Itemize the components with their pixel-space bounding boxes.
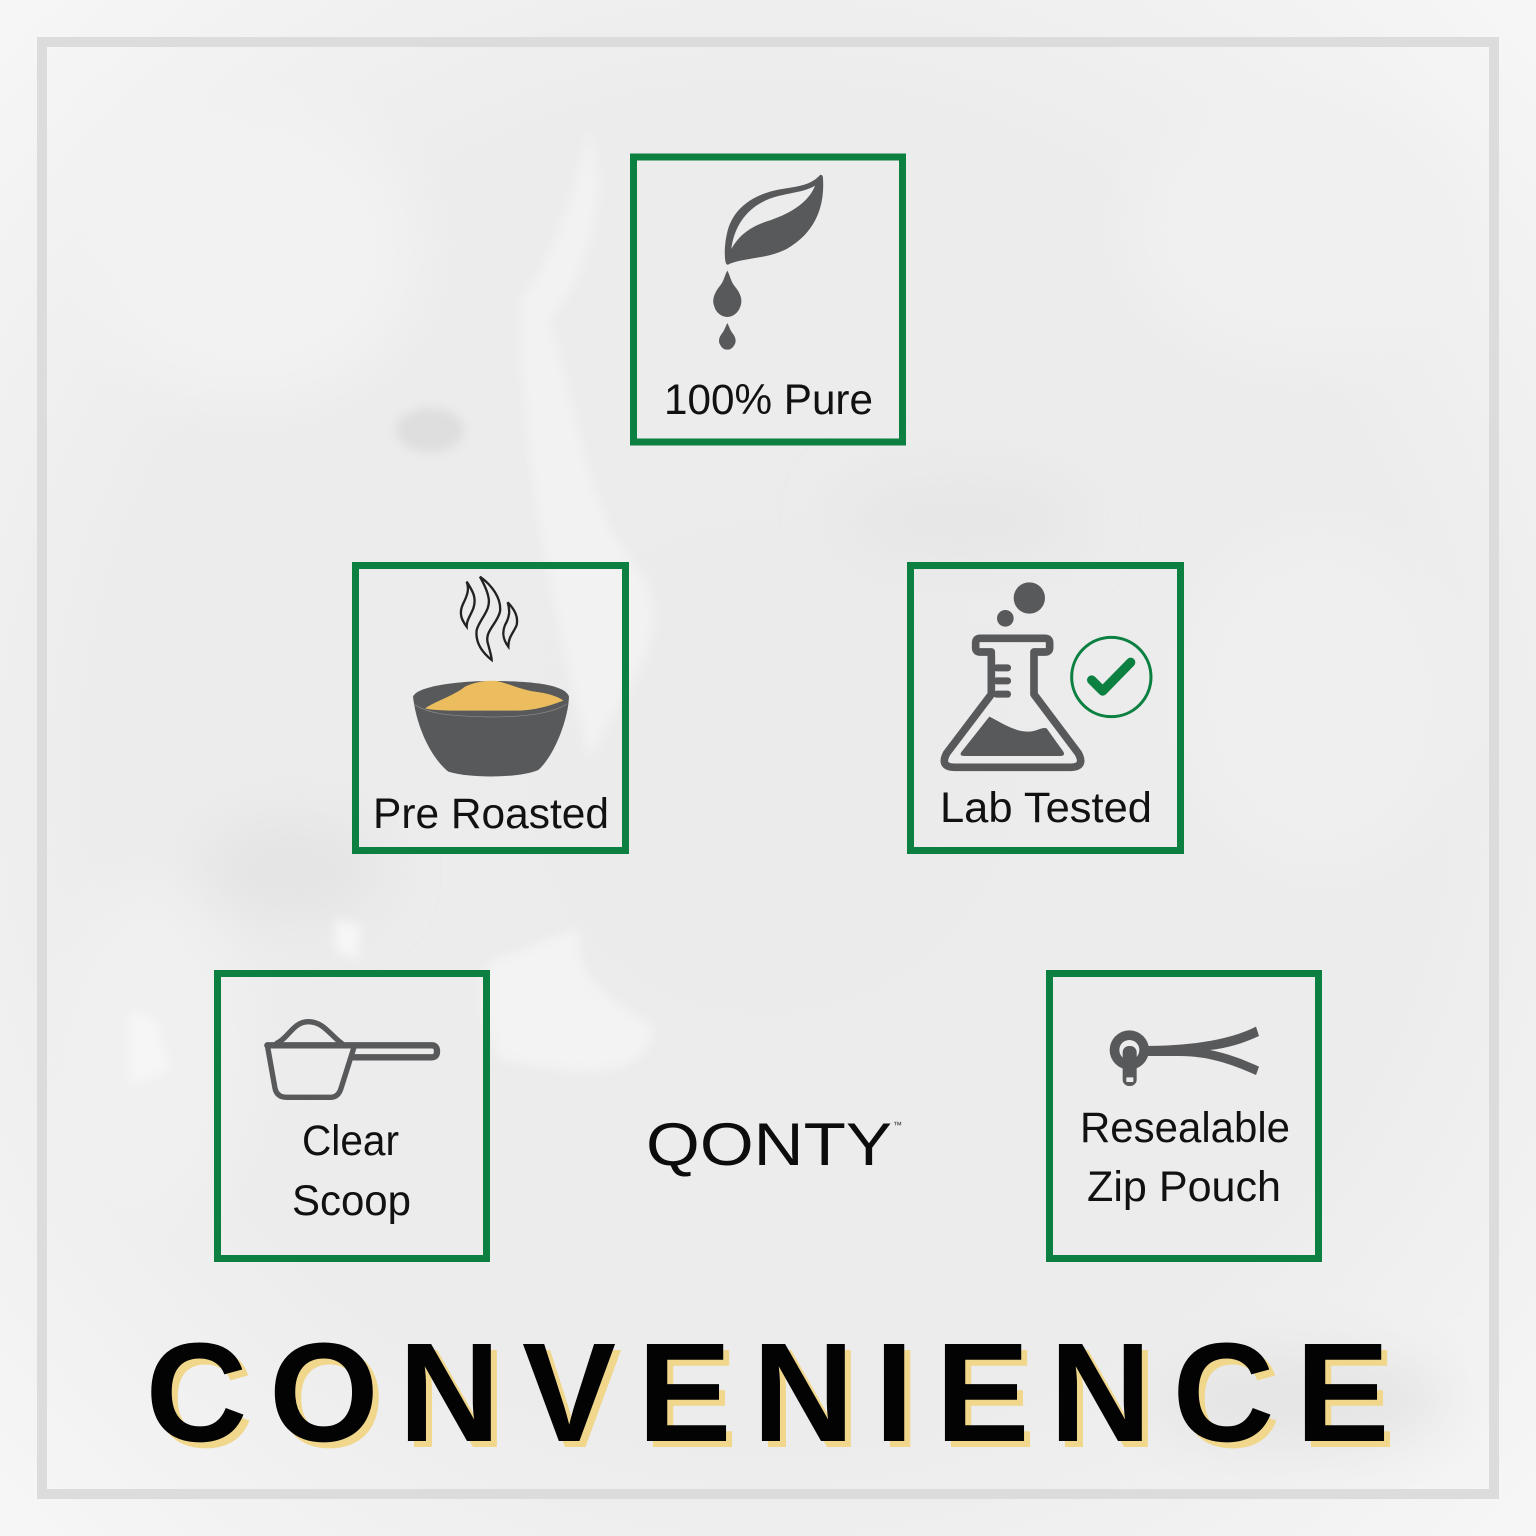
panel: Lab Tested (910, 566, 1180, 850)
icon: flask with check (944, 582, 1151, 767)
logo: ™ (893, 1120, 902, 1130)
label: Lab Tested (940, 784, 1152, 832)
label: 100% Pure (664, 376, 873, 424)
icon: leaf with drops (713, 175, 823, 350)
label: Resealable (1080, 1104, 1290, 1152)
title: CONVENIENCE: CONVENIENCE (146, 1313, 1390, 1471)
label line 2: Zip Pouch (1087, 1163, 1281, 1211)
icon: zip slider (1110, 1027, 1259, 1086)
label: Pre Roasted (373, 790, 609, 838)
label line 2: Scoop (292, 1177, 411, 1225)
logo: QONTY (646, 1111, 892, 1178)
panel: 100% Pure (634, 157, 902, 442)
icon: steaming bowl (413, 577, 569, 777)
icon: scoop (267, 1022, 437, 1097)
panel: Resealable Zip Pouch (1050, 974, 1318, 1258)
panel: Pre Roasted (356, 566, 626, 850)
panel: Clear Scoop (218, 974, 486, 1258)
label: Clear (302, 1117, 399, 1165)
title: CONVENIENCE: CONVENIENCE (152, 1319, 1396, 1477)
